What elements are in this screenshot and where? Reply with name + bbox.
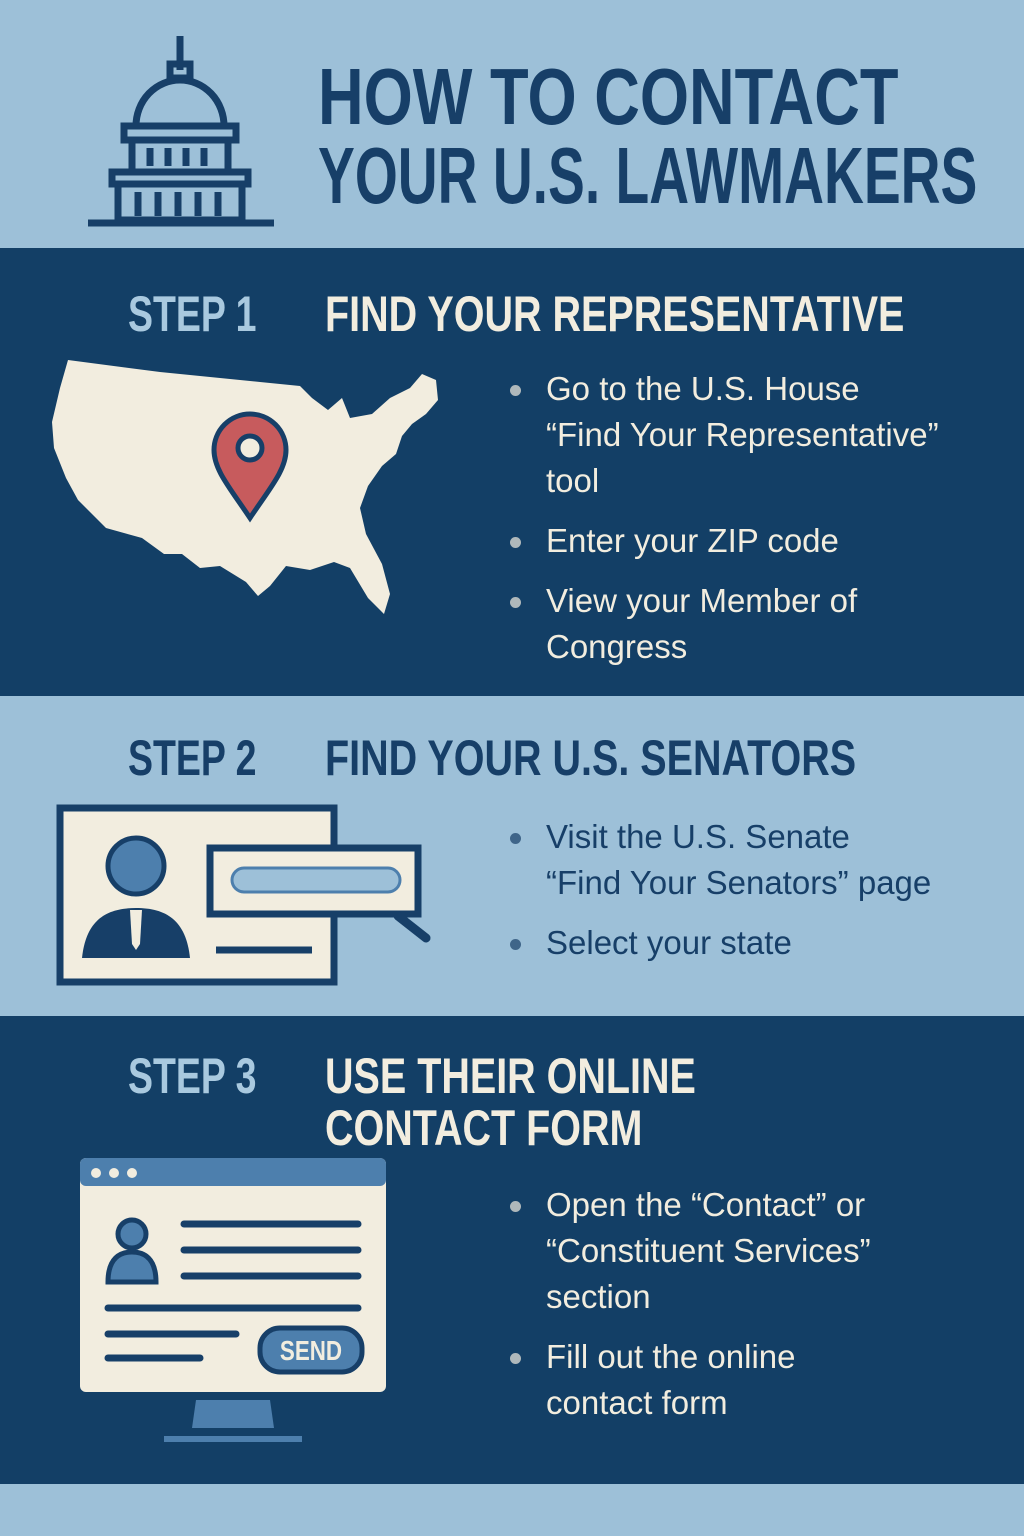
- step 1 bullets: Congress: [546, 628, 687, 665]
- panel: step 2: [56, 730, 931, 986]
- step 2 bullets: [510, 818, 931, 961]
- step 1 bullets: Enter your ZIP code: [546, 522, 839, 559]
- step 1 heading: FIND YOUR REPRESENTATIVE: [325, 286, 904, 342]
- icon: browser contact form: SEND: [280, 1336, 342, 1367]
- step 3 heading: CONTACT FORM: [325, 1100, 642, 1156]
- title: HOW TO CONTACT: [318, 52, 898, 141]
- step 3 bullets: Open the “Contact” or: [546, 1186, 865, 1223]
- icon: capitol dome: [88, 36, 274, 226]
- panel: step 3: [0, 1016, 1024, 1484]
- step 3 bullets: [510, 1186, 871, 1421]
- step 3 heading: [128, 1048, 696, 1156]
- step 1 bullets: tool: [546, 462, 599, 499]
- title: [318, 52, 977, 220]
- panel: step 1: [0, 248, 1024, 696]
- step 2 bullets: “Find Your Senators” page: [546, 864, 931, 901]
- step 1 heading: STEP 1: [128, 286, 257, 342]
- step 1 bullets: View your Member of: [546, 582, 857, 619]
- step 2 heading: FIND YOUR U.S. SENATORS: [325, 730, 856, 786]
- step 2 bullets: Visit the U.S. Senate: [546, 818, 850, 855]
- step 3 heading: STEP 3: [128, 1048, 257, 1104]
- step 1 bullets: Go to the U.S. House: [546, 370, 860, 407]
- step 1 bullets: “Find Your Representative”: [546, 416, 939, 453]
- icon: browser contact form: [80, 1158, 386, 1442]
- step 3 heading: USE THEIR ONLINE: [325, 1048, 696, 1104]
- icon: US map with pin: [52, 360, 438, 614]
- step 3 bullets: section: [546, 1278, 651, 1315]
- step 2 bullets: Select your state: [546, 924, 792, 961]
- step 1 bullets: [510, 370, 939, 665]
- title: YOUR U.S. LAWMAKERS: [318, 131, 977, 220]
- step 2 heading: STEP 2: [128, 730, 257, 786]
- step 3 bullets: Fill out the online: [546, 1338, 795, 1375]
- step 3 bullets: “Constituent Services”: [546, 1232, 871, 1269]
- step 3 bullets: contact form: [546, 1384, 728, 1421]
- icon: senator profile search: [56, 804, 430, 986]
